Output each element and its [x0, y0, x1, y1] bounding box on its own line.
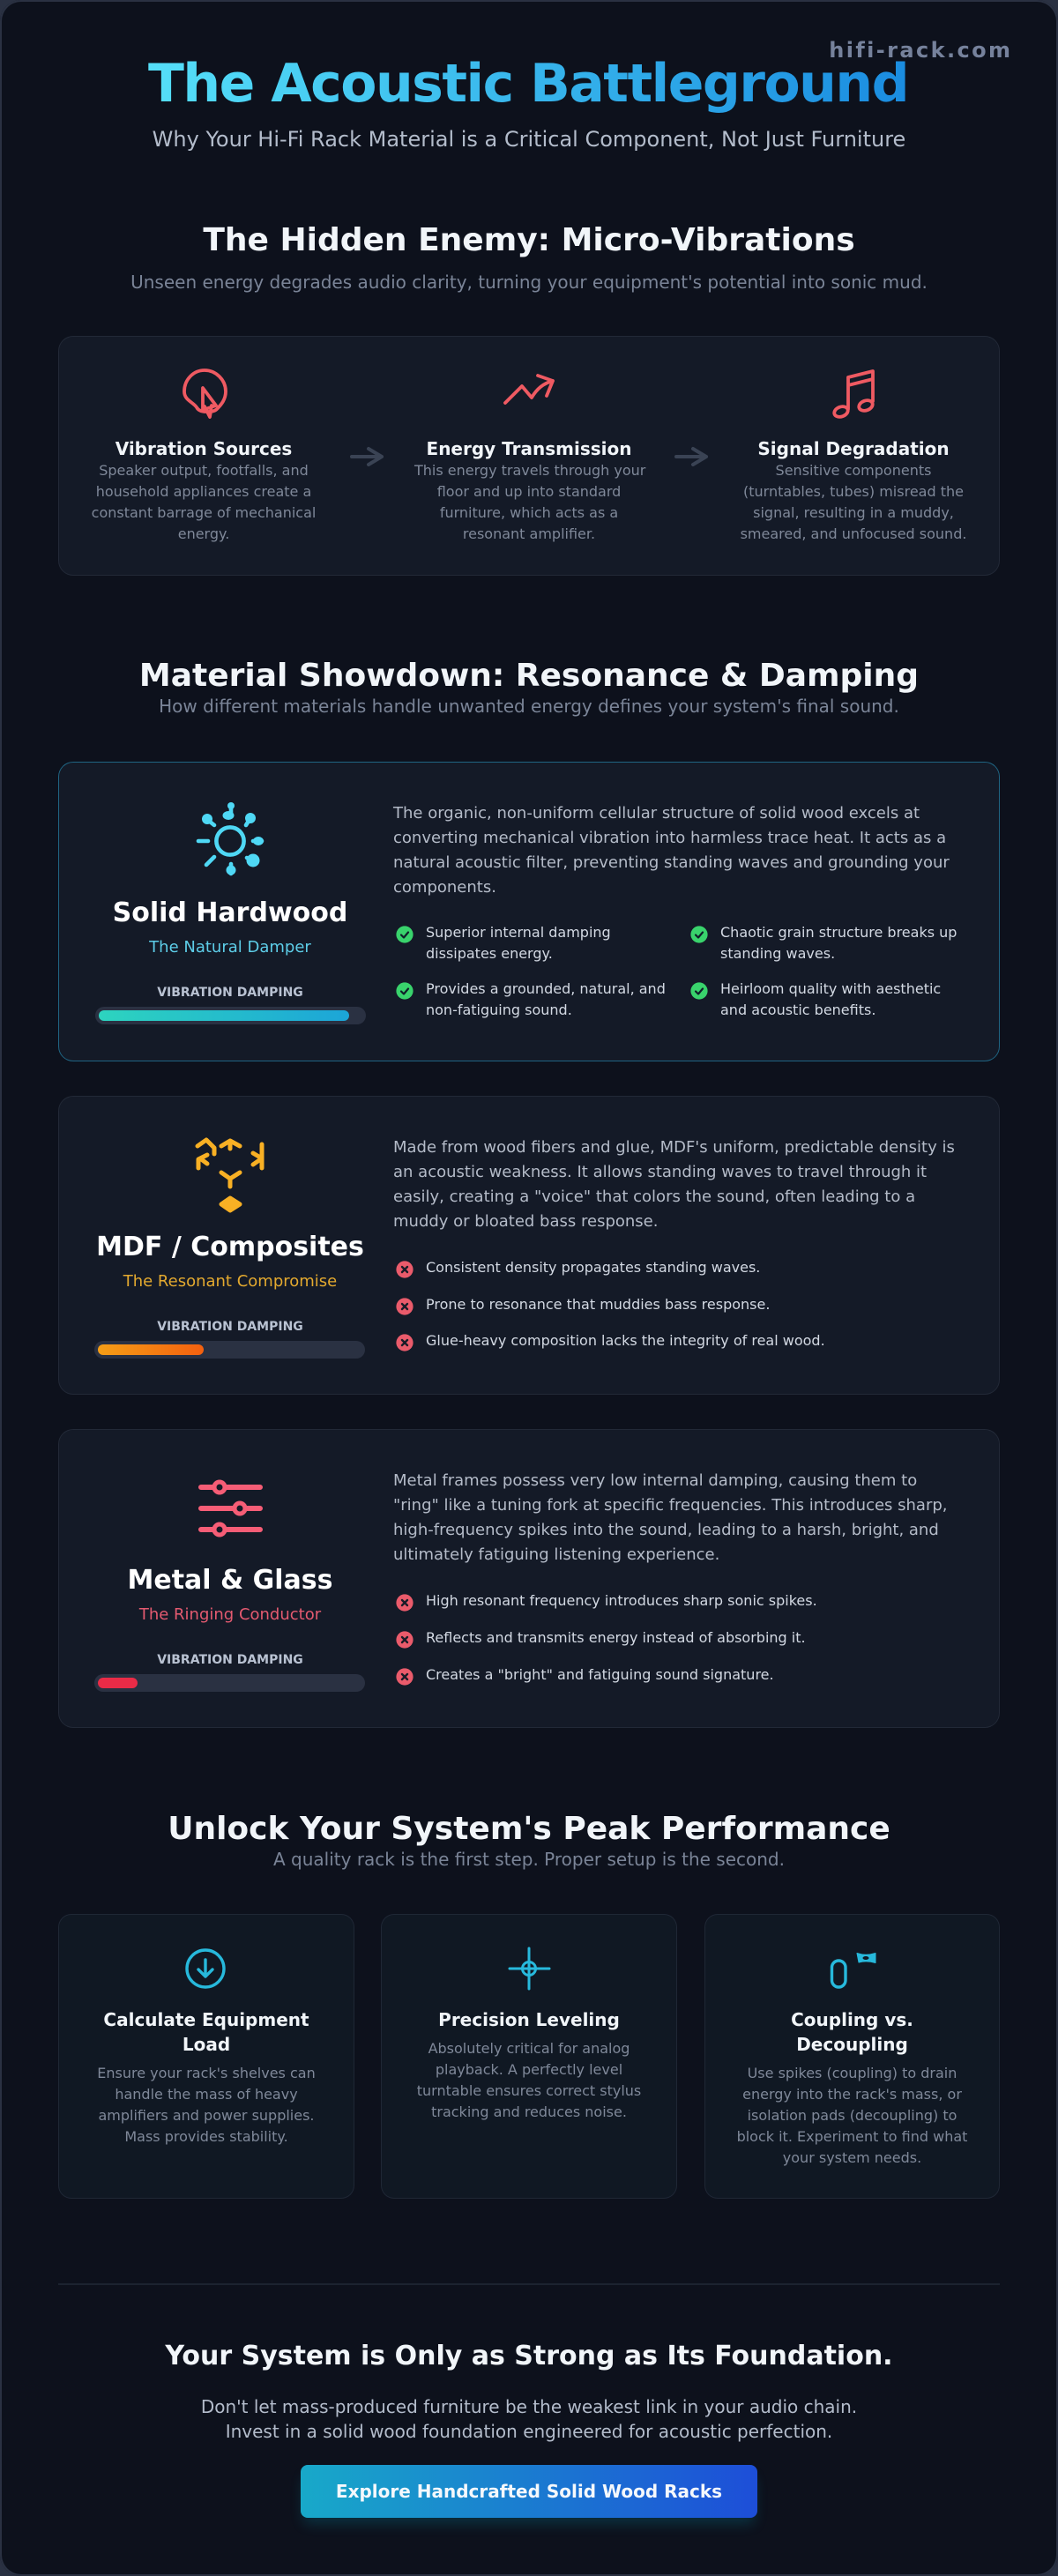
tip description: [97, 2065, 316, 2145]
step title: Energy Transmission: [427, 438, 631, 459]
step title: Signal Degradation: [757, 438, 950, 459]
step: signal degradation: [741, 369, 966, 542]
material details: [393, 804, 957, 1018]
tip description: Absolutely critical for analog: [428, 2040, 630, 2057]
drawback: High resonant frequency introduces sharp sonic spikes.: [426, 1592, 817, 1609]
step description: constant barrage of mechanical: [92, 504, 316, 521]
tip title: Decoupling: [796, 2034, 908, 2055]
subtitle: Why Your Hi-Fi Rack Material is a Critical Component, Not Just Furniture: [153, 127, 905, 152]
material summary: [94, 1137, 365, 1359]
tip description: block it. Experiment to find what: [737, 2128, 967, 2145]
material details: [393, 1471, 947, 1686]
material details: [393, 1138, 955, 1351]
benefit: dissipates energy.: [426, 945, 553, 962]
step description: signal, resulting in a muddy,: [753, 504, 954, 521]
damping label: VIBRATION DAMPING: [157, 986, 303, 1000]
icon: sliders: [198, 1479, 263, 1537]
description: easily, creating a "voice" that colors the sound, often leading to a: [393, 1187, 915, 1206]
material tagline: The Ringing Conductor: [139, 1605, 321, 1624]
arrow: transmission to degradation: [674, 447, 708, 466]
icon: composite fragments: [196, 1137, 264, 1213]
drawback: Reflects and transmits energy instead of absorbing it.: [426, 1629, 806, 1646]
step description: Speaker output, footfalls, and: [99, 462, 309, 479]
tip title: [791, 2009, 913, 2055]
step description: This energy travels through your: [414, 462, 645, 479]
subheading: peak performance: A quality rack is the first step. Proper setup is the second.: [273, 1849, 785, 1870]
description: Metal frames possess very low internal damping, causing them to: [393, 1471, 917, 1490]
drawback: Consistent density propagates standing waves.: [426, 1259, 760, 1276]
material name: MDF / Composites: [96, 1232, 364, 1262]
step description: furniture, which acts as a: [440, 504, 618, 521]
benefit: non-fatiguing sound.: [426, 1001, 572, 1018]
benefit: Heirloom quality with aesthetic: [720, 980, 941, 997]
closing text: Invest in a solid wood foundation engineered for acoustic perfection.: [226, 2421, 832, 2442]
subheading: material showdown: How different materials handle unwanted energy defines your system's final sound.: [159, 696, 899, 717]
damping bar: 15%: [94, 1674, 365, 1692]
heading: hidden enemy: The Hidden Enemy: Micro-Vibrations: [203, 222, 855, 258]
panel: metal and glass: [59, 1430, 999, 1727]
description: The organic, non-uniform cellular structure of solid wood excels at: [393, 804, 920, 823]
panel: precision leveling: [382, 1915, 676, 2198]
tip description: Ensure your rack's shelves can: [97, 2065, 316, 2081]
closing text: Don't let mass-produced furniture be the weakest link in your audio chain.: [201, 2396, 857, 2417]
description: ultimately fatiguing listening experience.: [393, 1545, 719, 1564]
closing text: [0, 2394, 1058, 2444]
step description: [741, 462, 966, 542]
closing heading: Your System is Only as Strong as Its Foundation.: [165, 2341, 893, 2371]
step description: floor and up into standard: [437, 483, 621, 500]
panel: vibration chain: [59, 337, 999, 575]
description: "ring" like a tuning fork at specific frequencies. This introduces sharp,: [393, 1496, 947, 1515]
call to action button: [301, 2465, 757, 2518]
description: high-frequency spikes into the sound, leading to a harsh, bright, and: [393, 1521, 939, 1539]
tip description: your system needs.: [783, 2149, 921, 2166]
tip description: Mass provides stability.: [124, 2128, 288, 2145]
call to action button: Explore Handcrafted Solid Wood Racks: [336, 2481, 722, 2502]
benefit: [396, 980, 666, 1018]
tip description: isolation pads (decoupling) to: [748, 2107, 957, 2124]
step description: [414, 462, 645, 542]
benefit: and acoustic benefits.: [720, 1001, 875, 1018]
panel: mdf composites: [59, 1097, 999, 1394]
panel: coupling vs decoupling: [705, 1915, 999, 2198]
description: converting mechanical vibration into harmless trace heat. It acts as a: [393, 829, 946, 847]
tip description: tracking and reduces noise.: [431, 2103, 627, 2120]
material summary: [94, 1479, 365, 1692]
icon: music note: [832, 369, 875, 419]
damping bar: 40%: [94, 1341, 365, 1359]
description: an acoustic weakness. It allows standing waves to travel through it: [393, 1163, 927, 1181]
material summary: [95, 802, 366, 1024]
step: energy transmission: [414, 374, 645, 542]
benefit: [690, 924, 957, 962]
damping label: VIBRATION DAMPING: [157, 1320, 303, 1334]
icon: vibration source: [183, 369, 227, 419]
tip description: playback. A perfectly level: [436, 2061, 622, 2078]
benefit: [690, 980, 941, 1018]
tip description: amplifiers and power supplies.: [98, 2107, 315, 2124]
tip description: [705, 2063, 999, 2169]
description: components.: [393, 878, 496, 897]
tip description: [417, 2040, 641, 2120]
step description: [92, 462, 316, 542]
tip title: Precision Leveling: [438, 2009, 620, 2030]
benefit: standing waves.: [720, 945, 835, 962]
step description: energy.: [178, 525, 229, 542]
step description: smeared, and unfocused sound.: [741, 525, 966, 542]
tip description: energy into the rack's mass, or: [742, 2086, 962, 2103]
heading: material showdown: Material Showdown: Resonance & Damping: [139, 658, 919, 694]
icon: spike and pad: [831, 1953, 876, 1989]
tip title: Calculate Equipment: [103, 2009, 309, 2030]
step description: resonant amplifier.: [463, 525, 595, 542]
material tagline: The Natural Damper: [149, 938, 311, 957]
tip title: Load: [183, 2034, 230, 2055]
description: [393, 1138, 955, 1231]
subheading: hidden enemy: Unseen energy degrades audio clarity, turning your equipment's potential into sonic mud.: [130, 272, 928, 293]
description: [393, 1471, 947, 1564]
brand watermark: hifi-rack.com: [829, 38, 1012, 63]
material tagline: The Resonant Compromise: [123, 1272, 337, 1291]
benefit: [396, 924, 611, 962]
icon: arrow in circle: [185, 1948, 226, 1989]
description: natural acoustic filter, preventing standing waves and grounding your: [393, 853, 950, 872]
benefit: Superior internal damping: [426, 924, 611, 941]
tip title: [103, 2009, 309, 2055]
benefit: Chaotic grain structure breaks up: [720, 924, 957, 941]
step description: Sensitive components: [776, 462, 931, 479]
icon: energy transmission: [503, 374, 555, 405]
tip description: Use spikes (coupling) to drain: [748, 2065, 957, 2081]
description: muddy or bloated bass response.: [393, 1212, 658, 1231]
step description: household appliances create a: [96, 483, 311, 500]
panel: solid hardwood: [59, 763, 999, 1061]
step description: (turntables, tubes) misread the: [743, 483, 964, 500]
arrow: sources to transmission: [350, 447, 384, 466]
damping label: VIBRATION DAMPING: [157, 1653, 303, 1667]
drawback: Creates a "bright" and fatiguing sound signature.: [426, 1666, 774, 1683]
heading: peak performance: Unlock Your System's Peak Performance: [168, 1811, 890, 1847]
benefit: Provides a grounded, natural, and: [426, 980, 666, 997]
material name: Solid Hardwood: [113, 897, 347, 928]
title: The Acoustic Battleground: [148, 53, 908, 115]
step: vibration sources: [92, 369, 316, 542]
drawback: Glue-heavy composition lacks the integrity of real wood.: [426, 1332, 825, 1349]
drawback: Prone to resonance that muddies bass response.: [426, 1296, 770, 1313]
tip description: turntable ensures correct stylus: [417, 2082, 641, 2099]
description: [393, 804, 950, 897]
description: Made from wood fibers and glue, MDF's uniform, predictable density is: [393, 1138, 955, 1157]
tip description: handle the mass of heavy: [115, 2086, 298, 2103]
damping bar: 95%: [95, 1007, 366, 1024]
icon: sun damper: [196, 802, 264, 876]
step title: Vibration Sources: [115, 438, 292, 459]
material name: Metal & Glass: [127, 1565, 332, 1596]
icon: crosshair: [508, 1947, 550, 1991]
panel: calculate load: [59, 1915, 354, 2198]
tip title: Coupling vs.: [791, 2009, 913, 2030]
